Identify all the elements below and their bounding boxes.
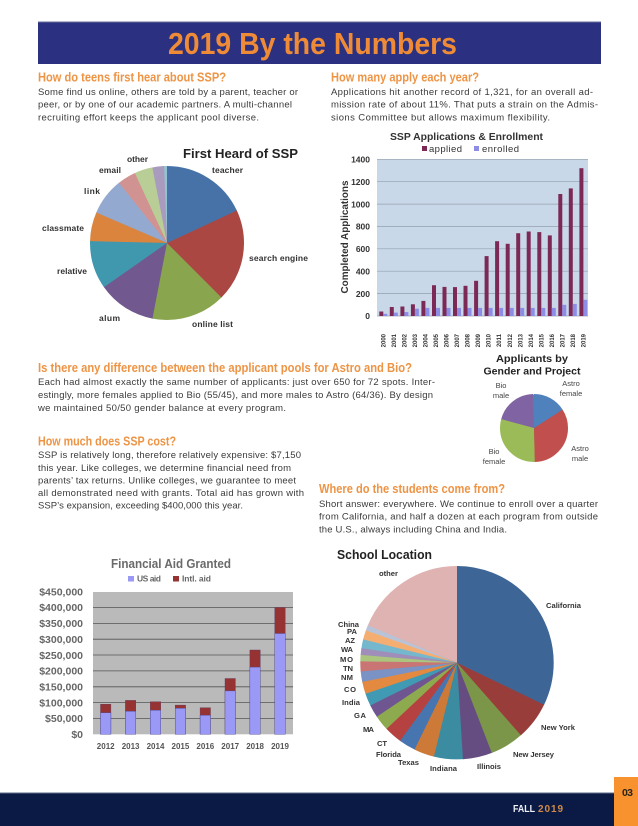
bar chart: SSP applications and enrollment: 600	[356, 244, 370, 254]
pie chart: first heard of SSP: online list	[192, 319, 233, 329]
bar chart: financial aid granted: 2019	[271, 742, 289, 751]
bar chart: financial aid granted: 2018	[246, 742, 265, 751]
pie chart: first heard of SSP: teacher	[212, 165, 244, 175]
bar chart: SSP applications and enrollment: 2007	[455, 333, 461, 347]
pie chart: applicants by gender and project: Bio	[489, 447, 499, 456]
text block: cost	[38, 434, 304, 512]
bar chart: financial aid granted: $400,000	[39, 602, 83, 614]
bar chart: financial aid granted: Intl. aid	[182, 574, 211, 584]
pie chart: school location: MA	[363, 725, 375, 734]
text block: cost: How much does SSP cost?	[38, 434, 176, 448]
pie chart: school location: New Jersey	[513, 750, 555, 759]
page number tab	[614, 777, 638, 826]
pie chart: first heard of SSP: email	[99, 165, 121, 175]
bar chart: SSP applications and enrollment: 2003	[413, 333, 419, 347]
text block: cost: SSP is relatively long, therefore relatively expensive: $7,150	[38, 450, 301, 461]
bar chart: SSP applications and enrollment: 0	[365, 311, 370, 321]
pie chart: school location: India	[342, 698, 361, 707]
pie chart: applicants by gender and project: Astro	[562, 379, 580, 388]
pie chart: school location: TN	[343, 664, 353, 673]
bar chart: financial aid granted: $300,000	[39, 634, 83, 646]
text block: cost: parents’ tax returns. Unlike colleges, we guarantee to meet	[38, 476, 296, 486]
bar chart: financial aid granted: 2013	[122, 742, 140, 751]
pie chart: applicants by gender and project: male	[493, 391, 509, 400]
bar chart: SSP applications and enrollment: 2016	[550, 333, 556, 347]
bar chart: financial aid granted: 2015	[172, 742, 190, 751]
bar chart: SSP applications and enrollment: 1200	[351, 177, 370, 187]
pie chart: school location: Illinois	[477, 762, 501, 771]
bar chart: SSP applications and enrollment: 1400	[351, 154, 370, 164]
bar chart: SSP applications and enrollment: 2019	[582, 333, 588, 347]
bar chart: SSP applications and enrollment: 2005	[434, 333, 440, 347]
pie chart: school location: Texas	[398, 758, 419, 767]
bar chart: financial aid granted	[39, 556, 293, 751]
pie chart: first heard of SSP: classmate	[42, 223, 84, 233]
bar chart: financial aid granted: 2012	[97, 742, 115, 751]
text block: applications: sions Committee but allows maximum flexibility.	[331, 112, 550, 124]
pie chart: school location: WA	[341, 645, 354, 654]
pie chart: applicants by gender and project: Gender and Project	[484, 366, 581, 378]
pie chart: first heard of SSP: First Heard of SSP	[183, 146, 298, 161]
bar chart: financial aid granted: $200,000	[39, 666, 83, 678]
text block: cost: SSP’s expansion, exceeding $400,000 this year.	[38, 500, 243, 512]
pie chart: applicants by gender and project: female	[483, 457, 505, 466]
bar chart: SSP applications and enrollment	[340, 132, 588, 347]
bar chart: financial aid granted: $250,000	[39, 650, 83, 662]
bar chart: SSP applications and enrollment: 2018	[571, 333, 577, 347]
footer bar: FALL	[513, 804, 535, 815]
pie chart: school location: CO	[344, 685, 356, 694]
text block: cost: all demonstrated need with grants. Total aid has grown with	[38, 488, 304, 499]
bar chart: SSP applications and enrollment: 2001	[392, 333, 398, 347]
page number tab: 03	[622, 787, 633, 799]
pie chart: applicants by gender and project: male	[572, 454, 588, 463]
pie chart: school location: AZ	[345, 636, 355, 645]
text block: first hear	[38, 70, 298, 124]
bar chart: SSP applications and enrollment: 200	[356, 289, 370, 299]
bar chart: financial aid granted: $450,000	[39, 586, 83, 598]
text block: applications: Applications hit another record of 1,321, for an overall ad-	[331, 87, 593, 98]
pie chart: school location: School Location	[337, 547, 432, 562]
text block: where students come from: the U.S., always including China and India.	[319, 524, 507, 536]
pie chart: applicants by gender and project: Applicants by	[496, 354, 568, 365]
pie chart: first heard of SSP: alum	[99, 313, 120, 323]
bar chart: SSP applications and enrollment: SSP Applications & Enrollment	[390, 132, 544, 143]
pie chart: school location: other	[379, 569, 398, 578]
bar chart: financial aid granted: 2016	[196, 742, 215, 751]
bar chart: SSP applications and enrollment: 2002	[402, 333, 408, 347]
pie chart: first heard of SSP: search engine	[249, 253, 308, 263]
text block: cost: this year. Like colleges, we determine financial need from	[38, 463, 291, 474]
bar chart: SSP applications and enrollment: enrolled	[482, 144, 519, 155]
pie chart: school location: CT	[377, 739, 387, 748]
pie chart: first heard of SSP: link	[84, 186, 100, 196]
pie chart: applicants by gender and project: female	[560, 389, 582, 398]
bar chart: SSP applications and enrollment: 2015	[539, 333, 545, 347]
bar chart: SSP applications and enrollment: 2013	[518, 333, 524, 347]
text block: first hear: How do teens first hear about SSP?	[38, 70, 226, 84]
pie chart: school location: Florida	[376, 750, 402, 759]
pie chart: applicants by gender and project: Astro	[571, 444, 589, 453]
text block: astro and bio: Each had almost exactly the same number of applicants: just over 650 for 72 spots. Inter-	[38, 377, 435, 388]
pie chart: school location: NM	[341, 673, 353, 682]
text block: applications: How many apply each year?	[331, 70, 479, 84]
footer bar: 2019	[538, 804, 563, 815]
bar chart: SSP applications and enrollment: 2000	[381, 333, 387, 347]
pie chart: school location: GA	[354, 711, 367, 720]
bar chart: financial aid granted: $150,000	[39, 682, 83, 694]
bar chart: financial aid granted: $100,000	[39, 698, 83, 710]
bar chart: SSP applications and enrollment: 2004	[424, 333, 430, 347]
text block: astro and bio: estingly, more females applied to Bio (55/45), and more males to Astro (64/36). By design	[38, 390, 433, 401]
bar chart: financial aid granted: 2017	[221, 742, 240, 751]
bar chart: SSP applications and enrollment: 1000	[351, 199, 370, 209]
text block: first hear: peer, or by one of our academic partners. A multi-channel	[38, 100, 292, 110]
text block: where students come from	[319, 482, 598, 536]
bar chart: SSP applications and enrollment: 2017	[560, 333, 566, 347]
bar chart: financial aid granted: $0	[71, 729, 83, 741]
pie chart: school location: China	[338, 620, 360, 629]
bar chart: SSP applications and enrollment: Completed Applications	[340, 180, 351, 294]
pie chart: school location: Indiana	[430, 764, 458, 773]
bar chart: financial aid granted: US aid	[137, 574, 161, 584]
bar chart: financial aid granted: 2014	[147, 742, 165, 751]
pie chart: first heard of SSP	[42, 146, 308, 329]
bar chart: SSP applications and enrollment: 2014	[529, 333, 535, 347]
pie chart: school location	[337, 547, 582, 773]
text block: where students come from: from California, and half a dozen at each program from outside	[319, 512, 598, 522]
bar chart: SSP applications and enrollment: 800	[356, 222, 370, 232]
bar chart: SSP applications and enrollment: 2010	[487, 333, 493, 347]
bar chart: SSP applications and enrollment: 400	[356, 266, 370, 276]
text block: first hear: Some find us online, others are told by a parent, teacher or	[38, 87, 298, 98]
text block: first hear: recruiting effort keeps the applicant pool diverse.	[38, 112, 259, 124]
bar chart: financial aid granted: $350,000	[39, 618, 83, 630]
pie chart: school location: MO	[340, 655, 353, 664]
text block: applications	[331, 70, 598, 124]
footer bar	[0, 792, 614, 826]
bar chart: financial aid granted: $50,000	[45, 713, 83, 725]
bar chart: SSP applications and enrollment: 2012	[508, 333, 514, 347]
bar chart: SSP applications and enrollment: applied	[429, 144, 462, 155]
bar chart: SSP applications and enrollment: 2009	[476, 333, 482, 347]
text block: where students come from: Short answer: everywhere. We continue to enroll over a quarter	[319, 499, 598, 510]
title banner	[38, 22, 601, 64]
pie chart: first heard of SSP: relative	[57, 266, 87, 276]
text block: where students come from: Where do the students come from?	[319, 482, 505, 496]
text block: astro and bio: Is there any difference between the applicant pools for Astro and Bio?	[38, 361, 412, 375]
bar chart: SSP applications and enrollment: 2011	[497, 333, 503, 347]
pie chart: school location: PA	[347, 627, 358, 636]
pie chart: applicants by gender and project	[483, 354, 589, 466]
text block: astro and bio	[37, 361, 435, 414]
pie chart: school location: New York	[541, 723, 576, 732]
pie chart: school location: California	[546, 601, 582, 610]
bar chart: SSP applications and enrollment: 2008	[466, 333, 472, 347]
text block: applications: mission rate of about 11%. That puts a strain on the Admis-	[331, 100, 598, 110]
title banner: 2019 By the Numbers	[168, 26, 457, 61]
bar chart: financial aid granted: Financial Aid Granted	[111, 556, 231, 571]
text block: astro and bio: we maintained 50/50 gender balance at every program.	[37, 403, 286, 414]
pie chart: applicants by gender and project: Bio	[496, 381, 506, 390]
bar chart: SSP applications and enrollment: 2006	[445, 333, 451, 347]
pie chart: first heard of SSP: other	[127, 154, 149, 164]
